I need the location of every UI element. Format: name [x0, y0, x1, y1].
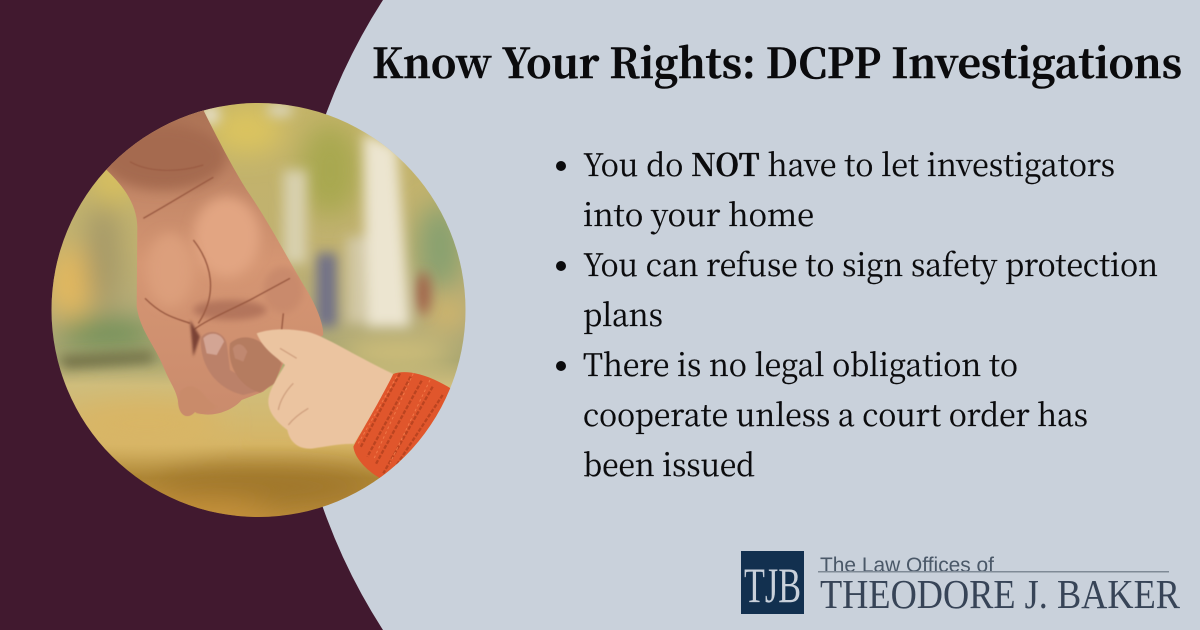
bullet 1: You do NOT have to let investigators [583, 140, 1115, 185]
bullet 2: You can refuse to sign safety protection [583, 240, 1158, 285]
logo mark: TJB monogram: TJB [744, 557, 801, 613]
logo text: firm name [818, 554, 1181, 617]
logo mark: TJB monogram [741, 551, 804, 614]
title: Know Your Rights: DCPP Investigations [372, 31, 1182, 90]
child hand [257, 329, 393, 449]
bullet 3 [556, 340, 1088, 485]
bullet 3: There is no legal obligation to [583, 340, 1018, 385]
bullet 2: plans [583, 290, 663, 335]
bullet 3: been issued [583, 440, 755, 485]
adult hand [106, 110, 324, 416]
child orange cuff [354, 372, 450, 478]
bullet 1: into your home [583, 190, 814, 235]
bullet 2 [556, 240, 1158, 335]
bullet 3: cooperate unless a court order has [583, 390, 1088, 435]
photo: adult hand holding child's finger in circle [47, 97, 470, 520]
logo text: firm name: The Law Offices of [820, 554, 994, 577]
panel: dark plum curved shape [0, 0, 383, 630]
logo: The Law Offices of Theodore J. Baker [741, 551, 1181, 617]
bullet list [556, 140, 1158, 485]
bullet 1 [556, 140, 1115, 235]
